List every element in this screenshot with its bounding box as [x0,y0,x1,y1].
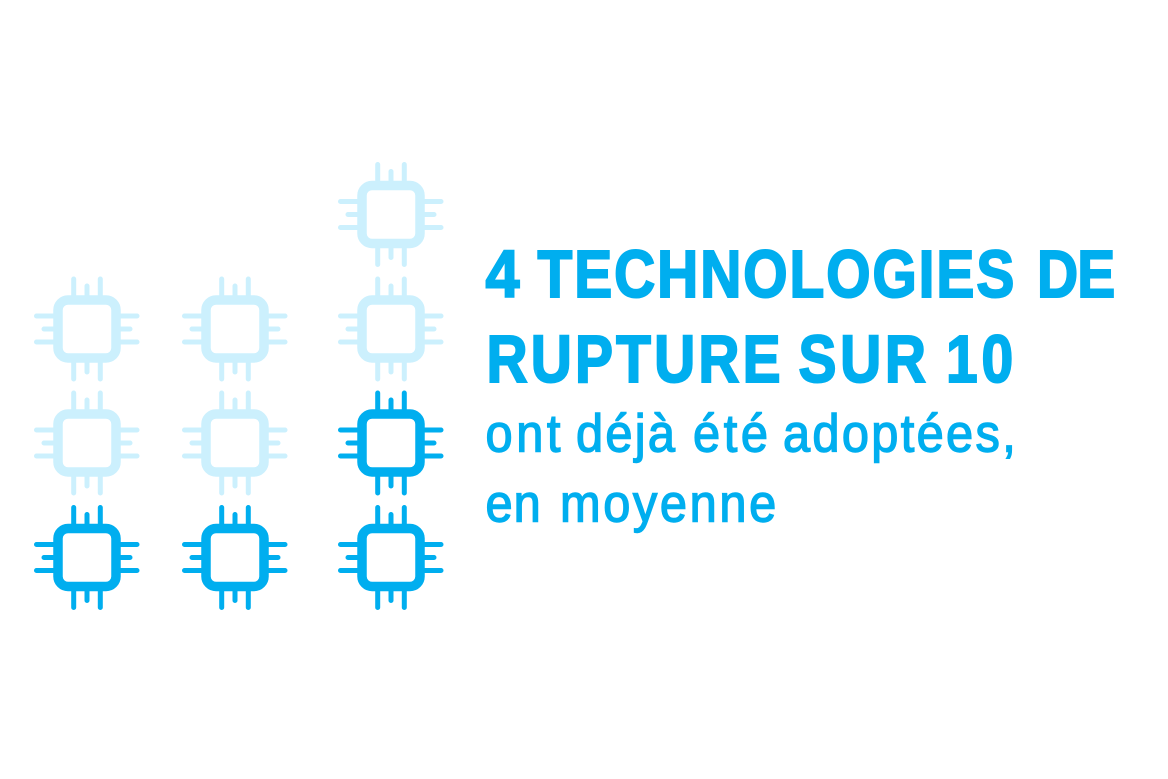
icon: chip column 2 row 2 light [184,393,285,493]
icon: chip column 3 row 3 light [340,279,441,379]
subtitle [486,403,1016,533]
heading line 2: SUR [798,323,926,397]
heading line 1: 4 [486,237,520,312]
heading line 1: TECHNOLOGIES [538,238,1014,312]
subtitle line 1: ont [486,403,560,463]
icon: chip column 1 row 3 light [36,279,137,379]
icon: chip column 3 row 4 light [340,164,441,264]
icon: chip column 2 row 1 filled [184,508,285,608]
heading line 2: 10 [946,323,1013,397]
icon grid: 10 chips [36,164,441,608]
subtitle line 1 [486,403,1016,463]
icon: chip column 3 row 2 filled [340,393,441,493]
icon: chip column 2 row 3 light [184,279,285,379]
icon: chip column 1 row 1 filled [36,508,137,608]
heading line 1: DE [1037,238,1115,312]
icon: chip column 1 row 2 light [36,393,137,493]
heading line 2: RUPTURE [486,323,781,397]
subtitle line 1: été [693,403,768,463]
subtitle line 1: déjà [576,403,676,463]
subtitle line 2: en [486,473,541,533]
icon: chip column 3 row 1 filled [340,508,441,608]
heading line 2 [486,323,1013,397]
subtitle line 1: adoptées, [783,403,1016,463]
subtitle line 2: moyenne [560,473,776,533]
heading [486,237,1115,397]
